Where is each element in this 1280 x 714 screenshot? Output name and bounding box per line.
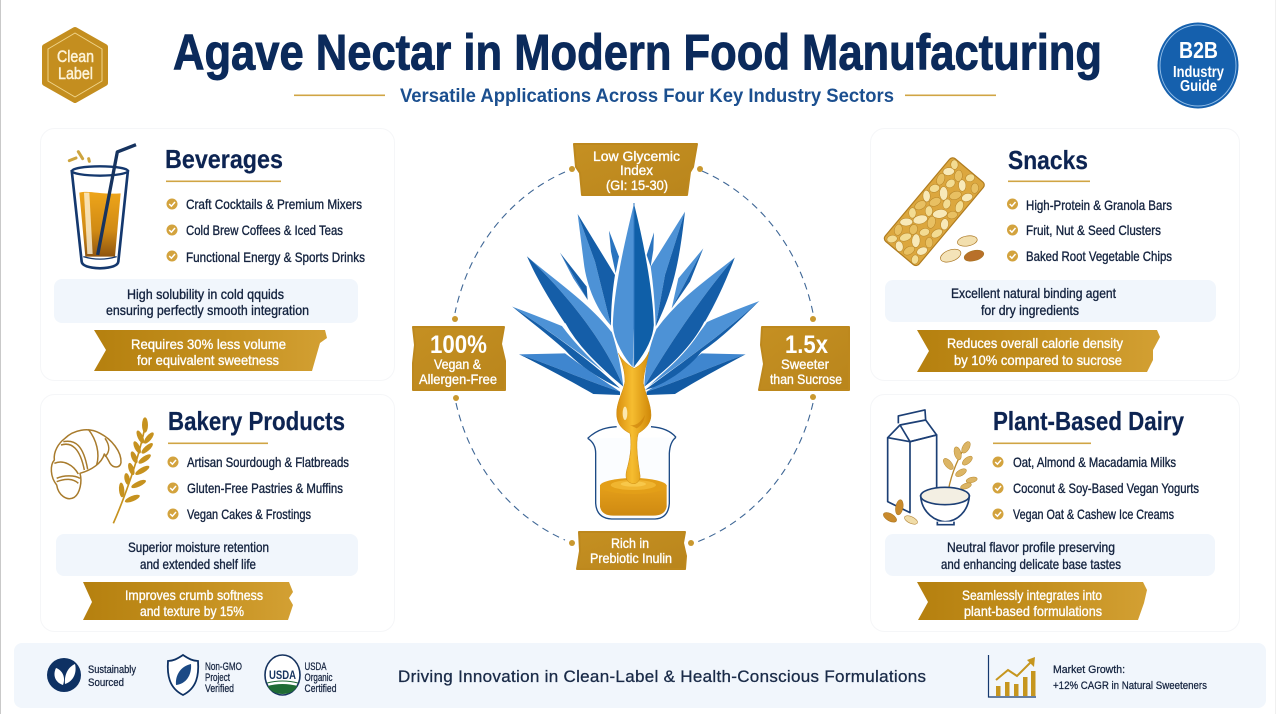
icon: USDA organic seal <box>265 655 300 695</box>
list: bakery uses <box>168 454 349 522</box>
info box: ensuring perfectly smooth integration <box>106 302 309 318</box>
label: non-GMO project verified: Verified <box>205 683 234 695</box>
label: non-GMO project verified: Project <box>205 672 230 684</box>
label: market growth: Market Growth: <box>1053 664 1125 676</box>
panel: Snacks <box>870 128 1240 380</box>
tag: Low Glycemic Index: Index <box>620 162 653 178</box>
footer band <box>14 643 1266 708</box>
ribbon callout: Seamlessly integrates into <box>962 587 1102 603</box>
list: snack uses: Baked Root Vegetable Chips <box>1026 248 1172 264</box>
icon: non-GMO shield <box>168 655 198 695</box>
list: dairy uses: Vegan Oat & Cashew Ice Creams <box>1013 506 1174 522</box>
label: USDA organic certified: Certified <box>304 683 336 695</box>
info box: High solubility in cold qquids <box>127 286 284 302</box>
badge: B2B Industry Guide: B2B <box>1179 37 1218 63</box>
heading: Snacks: Snacks <box>1008 145 1088 175</box>
tag: Low Glycemic Index: (GI: 15-30) <box>606 177 668 193</box>
ribbon callout: Improves crumb softness <box>125 587 263 603</box>
ribbon callout <box>83 582 293 620</box>
label: USDA organic certified <box>304 661 336 695</box>
tag: Low Glycemic Index <box>574 144 697 195</box>
label: sustainably sourced: Sourced <box>88 677 124 689</box>
tag: 100% Vegan: Vegan & <box>434 356 482 372</box>
icon: croissant <box>51 429 121 499</box>
label: sustainably sourced: Sustainably <box>88 664 136 676</box>
center diagram <box>413 144 849 569</box>
tag: 100% Vegan: 100% <box>430 331 487 359</box>
illustration: agave plant <box>511 202 760 395</box>
heading: Beverages: Beverages <box>165 144 283 174</box>
tag: Rich in Prebiotic Inulin: Rich in <box>611 535 649 551</box>
icon: market growth chart <box>988 655 1036 697</box>
info box <box>885 280 1216 322</box>
info box <box>56 534 358 576</box>
ribbon callout <box>917 330 1160 372</box>
label: non-GMO project verified: Non-GMO <box>205 661 242 673</box>
list: snack uses: Fruit, Nut & Seed Clusters <box>1026 222 1161 238</box>
dashed ring with connector dots <box>452 166 816 546</box>
tag: 1.5x Sweeter: than Sucrose <box>770 371 842 387</box>
ribbon callout <box>917 582 1147 620</box>
list: beverage uses: Functional Energy & Sports Drinks <box>186 249 365 265</box>
tag: Rich in Prebiotic Inulin: Prebiotic Inulin <box>590 550 672 566</box>
icon: sustainably sourced <box>47 658 81 692</box>
tag: 1.5x Sweeter <box>759 327 849 390</box>
tag: Rich in Prebiotic Inulin <box>577 532 686 569</box>
icon: USDA organic seal: USDA <box>269 668 296 682</box>
ribbon callout: Reduces overall calorie density <box>947 335 1123 351</box>
badge: B2B Industry Guide: Guide <box>1180 78 1217 95</box>
list: beverage uses: Craft Cocktails & Premium Mixers <box>186 196 362 212</box>
tag: 1.5x Sweeter: 1.5x <box>785 331 828 359</box>
ribbon callout: by 10% compared to sucrose <box>954 352 1122 368</box>
badge: Clean Label: Label <box>58 64 93 83</box>
info box: and extended shelf life <box>140 556 256 572</box>
footer tagline: Driving Innovation in Clean-Label & Health-Conscious Formulations <box>398 667 926 686</box>
badge: Clean Label <box>45 30 105 100</box>
info box: for dry ingredients <box>981 302 1079 318</box>
info box: Excellent natural binding agent <box>951 285 1116 301</box>
list: snack uses <box>1007 197 1172 264</box>
label: market growth <box>1053 664 1207 692</box>
title: Agave Nectar in Modern Food Manufacturing <box>173 24 1102 80</box>
tag: Low Glycemic Index: Low Glycemic <box>593 148 680 164</box>
ribbon callout: Requires 30% less volume <box>131 336 286 352</box>
info box <box>54 279 358 323</box>
info box: Neutral flavor profile preserving <box>947 539 1115 555</box>
list: beverage uses: Cold Brew Coffees & Iced Teas <box>186 222 343 238</box>
badge: B2B Industry Guide <box>1158 22 1238 108</box>
icon: granola bar <box>881 155 986 268</box>
label: USDA organic certified: USDA <box>304 661 327 673</box>
icon: drink glass with straw <box>69 145 136 268</box>
label: non-GMO project verified <box>205 661 242 695</box>
illustration: nectar drop and beaker <box>588 352 676 519</box>
label: market growth: +12% CAGR in Natural Sweeteners <box>1053 680 1207 692</box>
icon: wheat <box>113 417 155 523</box>
list: snack uses: High-Protein & Granola Bars <box>1026 197 1172 213</box>
list: bakery uses: Gluten-Free Pastries & Muffins <box>187 480 343 496</box>
list: dairy uses <box>992 454 1199 522</box>
info box: and enhancing delicate base tastes <box>941 556 1121 572</box>
info box: Superior moisture retention <box>128 539 269 555</box>
ribbon callout: and texture by 15% <box>140 603 244 619</box>
tag: 100% Vegan <box>413 327 505 390</box>
list: beverage uses <box>166 196 365 265</box>
badge: Clean Label: Clean <box>57 47 94 66</box>
list: bakery uses: Vegan Cakes & Frostings <box>187 506 311 522</box>
list: bakery uses: Artisan Sourdough & Flatbreads <box>187 454 349 470</box>
label: USDA organic certified: Organic <box>304 672 333 684</box>
list: dairy uses: Coconut & Soy-Based Vegan Yogurts <box>1013 480 1199 496</box>
tag: 1.5x Sweeter: Sweeter <box>781 356 829 372</box>
ribbon callout: plant-based formulations <box>964 603 1102 619</box>
heading: Plant-Based Dairy: Plant-Based Dairy <box>993 406 1184 436</box>
panel: Plant-Based Dairy <box>870 394 1240 632</box>
info box <box>885 534 1215 576</box>
label: sustainably sourced <box>88 664 136 689</box>
ribbon callout <box>94 330 327 371</box>
subtitle: Versatile Applications Across Four Key Industry Sectors <box>400 86 894 107</box>
panel: Beverages <box>40 128 394 380</box>
icon: milk carton, bowl and oats <box>882 410 978 526</box>
heading: Bakery Products: Bakery Products <box>168 406 345 436</box>
panel: Bakery Products <box>40 394 394 632</box>
list: dairy uses: Oat, Almond & Macadamia Milks <box>1013 454 1176 470</box>
badge: B2B Industry Guide: Industry <box>1173 64 1224 81</box>
tag: 100% Vegan: Allergen-Free <box>419 371 497 387</box>
ribbon callout: for equivalent sweetness <box>137 352 279 368</box>
